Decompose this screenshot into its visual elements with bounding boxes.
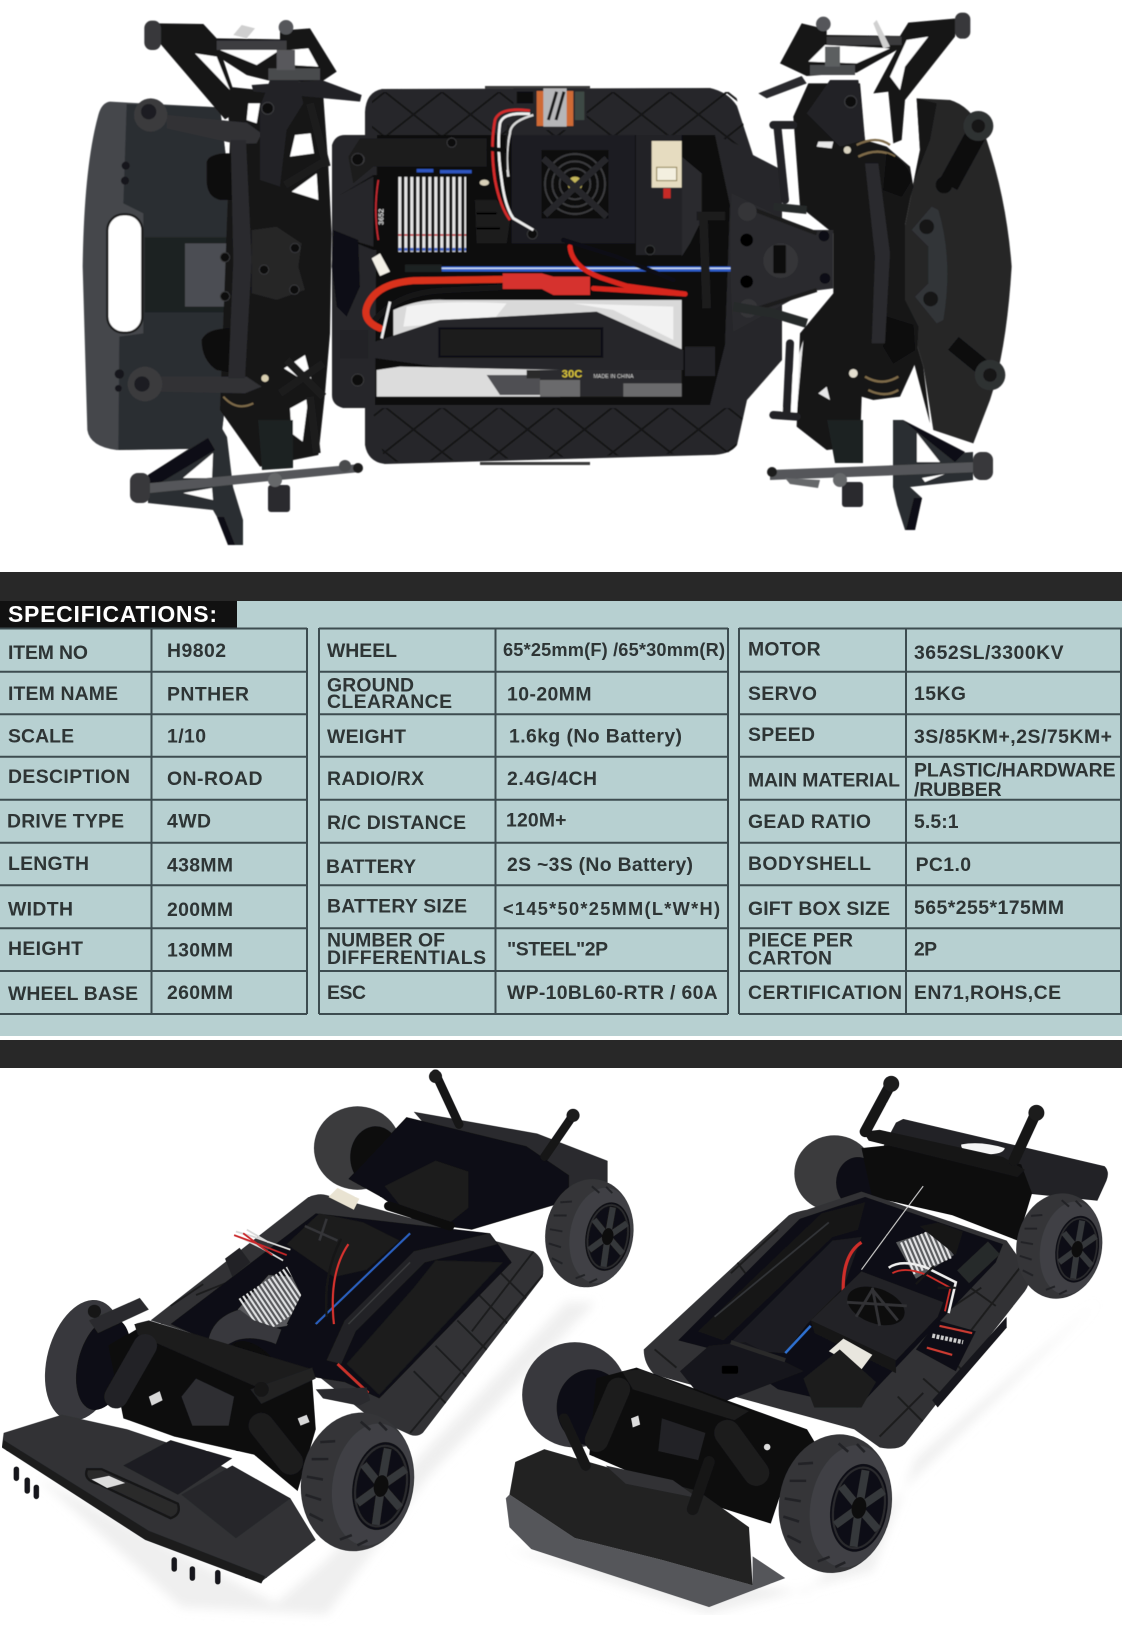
battery upper section bbox=[393, 300, 682, 350]
column 3: 3S/85KM+,2S/75KM+ bbox=[914, 726, 1112, 748]
near rear wheel bbox=[537, 1172, 642, 1294]
photo: left chassis, perspective view bbox=[2, 1070, 642, 1614]
wing legs bbox=[16, 1469, 218, 1582]
chassis lattice strips bbox=[372, 92, 750, 462]
cross bar bbox=[140, 464, 360, 494]
column 1: WIDTH bbox=[8, 899, 73, 921]
column 3: MOTOR bbox=[748, 639, 821, 661]
battery connector bbox=[503, 273, 590, 295]
motor: 3652 bbox=[376, 209, 385, 225]
gearbox bbox=[252, 227, 305, 300]
column 3: CARTON bbox=[748, 947, 832, 969]
column 3: PLASTIC/HARDWARE bbox=[914, 760, 1116, 782]
rear body post arms bbox=[167, 115, 262, 144]
small white plug bbox=[372, 253, 390, 276]
shock absorbers rear bbox=[202, 153, 237, 373]
front foam bumper bbox=[509, 1449, 753, 1585]
column 1: DESCIPTION bbox=[8, 766, 130, 788]
hub and thumb screw bbox=[827, 420, 863, 463]
small steering arms bbox=[773, 125, 797, 417]
block beside the suspension bbox=[316, 1388, 370, 1406]
column 2: BATTERY SIZE bbox=[327, 896, 467, 918]
rear foam bumper bbox=[414, 1112, 607, 1195]
front wing plate bbox=[2, 1415, 316, 1582]
front half: bulkhead, suspension, foam bumper: MADE IN CHINA bbox=[593, 374, 634, 380]
rear suspension mass bbox=[348, 1117, 569, 1230]
column 3: 3652SL/3300KV bbox=[914, 642, 1064, 664]
column 3: /RUBBER bbox=[914, 779, 1002, 801]
column 3: CERTIFICATION bbox=[748, 982, 902, 1004]
front suspension bbox=[109, 1320, 316, 1491]
front shocks and springs bbox=[857, 140, 898, 394]
front wing bbox=[506, 1495, 785, 1607]
hub and thumb screw bbox=[258, 420, 293, 470]
column 1 bbox=[7, 640, 262, 1005]
foam posts bbox=[693, 1462, 709, 1509]
column 3: 5.5:1 bbox=[914, 811, 959, 833]
column 1: ON-ROAD bbox=[167, 768, 262, 790]
near rear wheel bbox=[1008, 1186, 1111, 1306]
front shock tower bar bbox=[865, 163, 890, 343]
far front wheel bbox=[522, 1342, 627, 1447]
upper rear arm frame bbox=[157, 23, 337, 119]
column 1: PNTHER bbox=[167, 684, 249, 706]
column 3: SPEED bbox=[748, 724, 815, 746]
column 2: BATTERY bbox=[326, 856, 416, 878]
column 3: SERVO bbox=[748, 683, 817, 705]
column 2: 2.4G/4CH bbox=[507, 768, 597, 790]
main chassis tub bbox=[332, 86, 782, 465]
column 2: 120M+ bbox=[506, 810, 566, 832]
near front wheel bbox=[290, 1404, 425, 1560]
steering rod bbox=[697, 215, 725, 308]
column 3: PC1.0 bbox=[916, 854, 971, 876]
battery cover bbox=[347, 1261, 503, 1395]
body posts bbox=[865, 1076, 1044, 1161]
rear body bar bbox=[863, 1130, 1025, 1177]
column 1: 260MM bbox=[167, 982, 233, 1004]
motor end cap bbox=[475, 200, 510, 243]
receiver bbox=[916, 1320, 976, 1371]
chassis tub bbox=[644, 1192, 1030, 1449]
heading: SPECIFICATIONS: SPECIFICATIONS: bbox=[8, 601, 217, 627]
column 3: EN71,ROHS,CE bbox=[914, 982, 1061, 1004]
column 2: <145*50*25MM(L*W*H) bbox=[503, 899, 720, 919]
column 2: 1.6kg (No Battery) bbox=[509, 726, 682, 748]
top motor mount block bbox=[348, 138, 487, 183]
column 3: PIECE PER bbox=[748, 930, 853, 952]
antenna wire bbox=[861, 1186, 923, 1270]
soft floor shadow bbox=[509, 1302, 1097, 1614]
ESC bbox=[512, 135, 635, 243]
rear wing plate bbox=[83, 102, 235, 450]
column 1: 438MM bbox=[167, 855, 233, 877]
arms in the suspension bbox=[280, 103, 327, 453]
lower rear arm frame bbox=[130, 420, 363, 545]
battery strap bbox=[327, 1233, 497, 1364]
ESC bbox=[287, 1213, 399, 1277]
column 1: 130MM bbox=[167, 940, 233, 962]
red lead bbox=[843, 1242, 861, 1295]
column 2 bbox=[326, 640, 725, 1004]
column 3: MAIN MATERIAL bbox=[748, 770, 900, 792]
cross bar bbox=[770, 462, 980, 480]
column 2: WP-10BL60-RTR / 60A bbox=[507, 982, 718, 1004]
column 2: WEIGHT bbox=[327, 726, 406, 748]
battery leads bbox=[366, 240, 685, 328]
upper front arm frame bbox=[780, 18, 957, 143]
lower battery right bbox=[540, 370, 682, 397]
motor bbox=[209, 1266, 321, 1371]
electronics, motor and battery bbox=[340, 88, 733, 376]
bumper bracket bbox=[912, 207, 947, 323]
photo: top-down view of the chassis bbox=[83, 13, 1012, 545]
column 3: GIFT BOX SIZE bbox=[748, 898, 890, 920]
near front wheel bbox=[768, 1425, 903, 1582]
column 3: BODYSHELL bbox=[748, 853, 871, 875]
column 3: 2P bbox=[914, 939, 937, 961]
photo: right chassis, perspective view bbox=[506, 1076, 1111, 1614]
side block with white connector bbox=[636, 135, 702, 257]
column 1: DRIVE TYPE bbox=[7, 811, 124, 833]
foam bumper bbox=[903, 98, 1012, 443]
rear suspension mass bbox=[861, 1143, 1032, 1241]
body posts on bumper bbox=[936, 111, 1005, 390]
red and blue lines bbox=[316, 1233, 410, 1324]
column 2: RADIO/RX bbox=[327, 768, 424, 790]
far rear wheel bbox=[314, 1106, 401, 1190]
panel: specifications table bbox=[0, 601, 1122, 1036]
column 1: H9802 bbox=[167, 640, 226, 662]
dark band below specifications bbox=[0, 1040, 1122, 1068]
column 1: 4WD bbox=[167, 811, 211, 833]
body post heads bbox=[134, 98, 167, 132]
column 2: 2S ~3S (No Battery) bbox=[507, 854, 693, 876]
column 2: 65*25mm(F) /65*30mm(R) bbox=[503, 640, 725, 660]
far front wheel bbox=[32, 1291, 140, 1429]
handle slot in the plate bbox=[107, 214, 142, 333]
column 2: ESC bbox=[327, 982, 366, 1004]
centre block on the plate bbox=[145, 237, 232, 312]
white connector bbox=[328, 1188, 359, 1210]
table grid bbox=[0, 628, 1122, 1014]
tub interior bbox=[171, 1213, 512, 1398]
column 1: ITEM NAME bbox=[8, 683, 118, 705]
receiver bbox=[225, 1248, 250, 1277]
dark band above specifications bbox=[0, 572, 1122, 601]
lower front arm frame bbox=[767, 420, 993, 530]
spine of rear hub bbox=[260, 80, 303, 187]
rear suspension mass bbox=[220, 87, 332, 467]
battery strap bbox=[340, 302, 715, 376]
column 1: HEIGHT bbox=[8, 938, 83, 960]
tub interior bbox=[678, 1197, 1003, 1407]
slot in wing plate bbox=[86, 1469, 179, 1518]
servo wires bbox=[236, 1230, 290, 1261]
rear shock tower bar bbox=[228, 140, 252, 378]
column 1: 1/10 bbox=[167, 726, 206, 748]
column 1: WHEEL BASE bbox=[8, 983, 138, 1005]
blue shaft bbox=[785, 1326, 811, 1353]
rear plate bbox=[880, 1119, 1108, 1201]
far rear wheel bbox=[794, 1135, 880, 1212]
column 3 bbox=[748, 639, 1116, 1004]
chassis tub bbox=[151, 1194, 543, 1436]
motor bbox=[896, 1222, 994, 1279]
arm caps bbox=[144, 21, 161, 50]
column 1: 200MM bbox=[167, 899, 233, 921]
column 2: WHEEL bbox=[327, 640, 397, 662]
front suspension mass bbox=[793, 83, 918, 450]
column 2: R/C DISTANCE bbox=[327, 812, 466, 834]
side rail bbox=[932, 1317, 1007, 1407]
soft floor shadow bbox=[36, 1302, 595, 1614]
motor cooling fins bbox=[398, 102, 466, 327]
rear wing plate and left suspension bbox=[83, 20, 362, 467]
centre drive shaft bbox=[405, 257, 733, 280]
column 2: 10-20MM bbox=[507, 684, 592, 706]
column 1: ITEM NO bbox=[8, 642, 88, 664]
column 2: CLEARANCE bbox=[327, 691, 452, 713]
front suspension bbox=[589, 1368, 818, 1524]
motor bbox=[340, 171, 510, 250]
receiver bbox=[513, 88, 587, 130]
bulkhead plate bbox=[680, 1342, 803, 1407]
battery area bbox=[724, 1237, 861, 1353]
bulkhead plate bbox=[730, 193, 833, 332]
ESC bbox=[811, 1271, 943, 1373]
column 2: DIFFERENTIALS bbox=[327, 947, 486, 969]
left body mount bbox=[89, 1298, 149, 1333]
column 2: NUMBER OF bbox=[327, 930, 445, 952]
column 3: 15KG bbox=[914, 683, 966, 705]
right body mount bbox=[250, 1368, 316, 1404]
battery strap bbox=[698, 1202, 865, 1340]
column 3: GEAD RATIO bbox=[748, 811, 871, 833]
column 3: 565*255*175MM bbox=[914, 897, 1064, 919]
front half: bulkhead, suspension, foam bumper bbox=[540, 13, 1012, 450]
servo wires bbox=[487, 110, 533, 230]
rear bulkhead plate bbox=[385, 1161, 468, 1222]
servo wires bbox=[889, 1263, 956, 1313]
column 1: SCALE bbox=[8, 726, 74, 748]
column 2: GROUND bbox=[327, 675, 414, 697]
front block bbox=[803, 1349, 876, 1407]
front half: bulkhead, suspension, foam bumper: 30C bbox=[562, 368, 582, 380]
column 2: "STEEL"2P bbox=[507, 939, 608, 961]
tub interior bbox=[375, 135, 730, 405]
white connector bbox=[829, 1339, 872, 1369]
column 1: LENGTH bbox=[8, 853, 89, 875]
lower battery section bbox=[332, 153, 560, 397]
